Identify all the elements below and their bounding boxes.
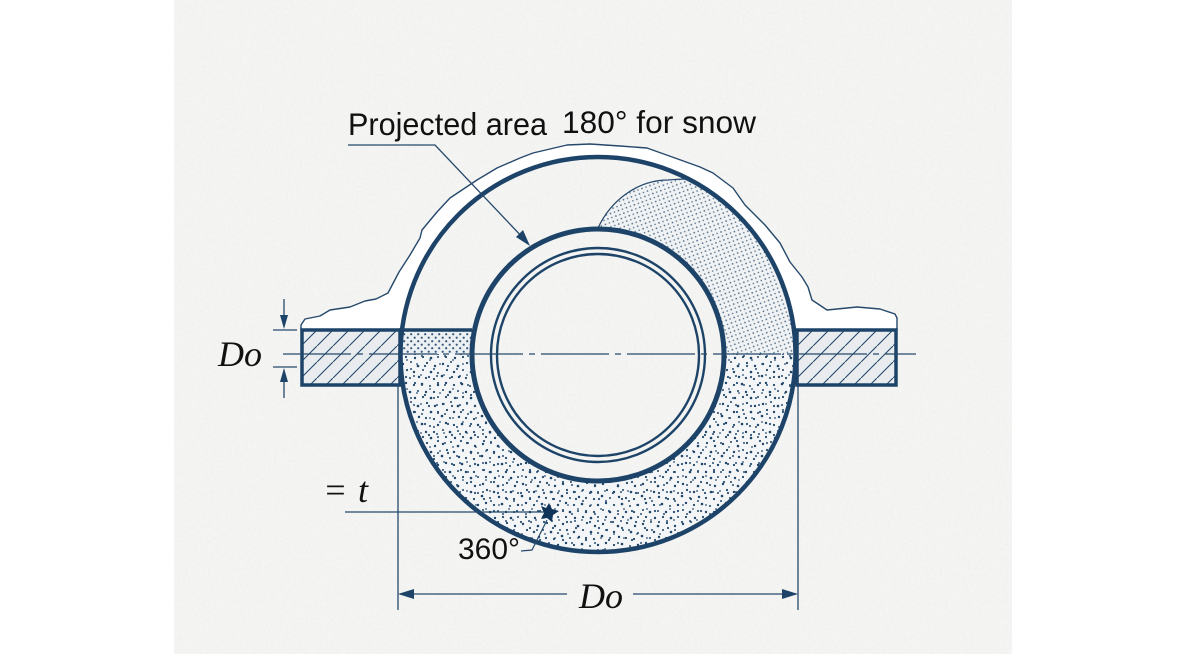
inner pipe wall — [491, 248, 705, 462]
snow cover — [301, 144, 897, 330]
label leader 360 — [521, 520, 547, 551]
leader arrow to pipe — [348, 145, 530, 246]
middle pipe ring — [472, 229, 724, 481]
block top edge — [399, 328, 472, 332]
star marker — [541, 503, 559, 522]
title label part one: Projected area — [348, 106, 547, 142]
label: Do left: Do — [217, 334, 262, 374]
right flange section — [797, 330, 896, 385]
stipple region outline — [598, 179, 687, 228]
outer diameter dimension — [398, 386, 798, 610]
outer insulation ring — [400, 157, 796, 552]
title label part two: 180° for snow — [562, 104, 756, 140]
label: equals t: = t — [323, 470, 369, 510]
thickness leader line — [345, 511, 556, 513]
left stippled block above centre line — [401, 331, 472, 354]
flange thickness dimension — [273, 299, 297, 398]
lower stippled insulation 360 degrees — [401, 354, 795, 551]
label: 360 degrees: 360° — [458, 533, 520, 566]
left flange section — [302, 330, 400, 385]
label: Do bottom: Do — [578, 576, 623, 616]
centre line — [283, 353, 916, 355]
upper right stippled projected region — [598, 179, 795, 354]
paper panel — [174, 0, 1012, 654]
